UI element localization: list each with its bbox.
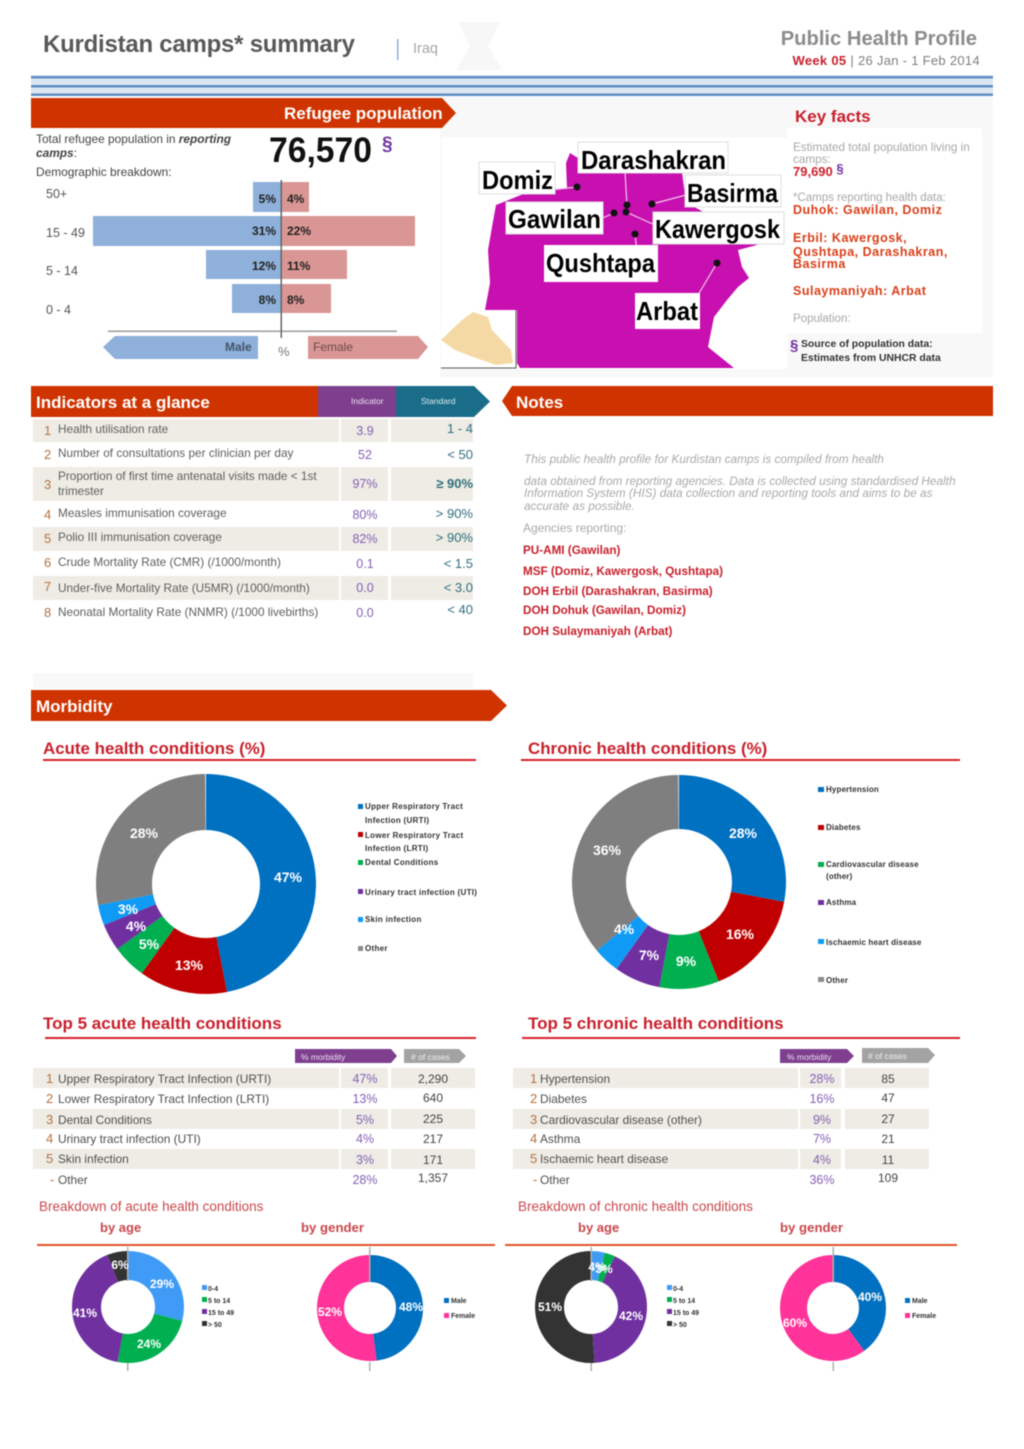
acute donut labels [118, 825, 303, 973]
top 5 chronic heading: Top 5 chronic health conditions [528, 1014, 784, 1033]
panel: indicators at a glance [31, 386, 490, 620]
acute table rows: Lower Respiratory Tract Infection (LRTI) [58, 1092, 269, 1106]
notes header [502, 386, 993, 416]
estimated population: Estimated total population living in [793, 141, 970, 154]
chronic table rows: 28% [809, 1072, 835, 1086]
camp label: Basirma: Basirma [687, 178, 778, 208]
chronic table rows: 9% [813, 1113, 831, 1127]
acute legend: Urinary tract infection (UTI) [365, 888, 477, 897]
panel: key facts: Erbil: Kawergosk, [793, 231, 907, 245]
row 1: Health utilisation rate [58, 422, 169, 436]
legend: acute by age [202, 1285, 234, 1329]
panel: refugee population: § [382, 134, 393, 155]
panel: chronic health conditions [521, 739, 960, 985]
chronic table rows: 85 [881, 1072, 895, 1086]
legend: acute by gender: Male [451, 1298, 467, 1305]
panel: refugee population [31, 98, 456, 359]
row 5: Polio III immunisation coverage [58, 530, 222, 544]
chronic table rows: Diabetes [540, 1092, 587, 1106]
population pyramid chart: 8% [287, 293, 305, 307]
panel: key facts: Sulaymaniyah: Arbat [793, 284, 927, 298]
panel: acute health conditions [43, 739, 477, 973]
panel: breakdown of acute conditions: by gender [301, 1220, 364, 1235]
chronic table rows: 4 [530, 1131, 537, 1146]
population source note: Source of population data: [801, 339, 933, 350]
inset: Iraq map [441, 310, 517, 368]
acute table rows: 3 [46, 1112, 53, 1127]
chronic table rows: 1 [530, 1071, 537, 1086]
donut: acute by age: 24% [137, 1337, 161, 1351]
refugee population banner [31, 98, 456, 128]
reporting agencies: DOH Dohuk (Gawilan, Domiz) [523, 604, 686, 617]
acute donut labels: 5% [139, 936, 160, 952]
reporting week: Week 05 | 26 Jan - 1 Feb 2014 [793, 53, 980, 68]
reporting agencies: DOH Erbil (Darashakran, Basirma) [523, 585, 713, 598]
acute donut labels: 3% [118, 901, 139, 917]
panel: notes: Agencies reporting: [523, 521, 626, 535]
row 4: > 90% [436, 506, 473, 521]
row 2: 2 [44, 447, 51, 462]
panel: top 5 chronic [513, 1014, 960, 1187]
legend: chronic by age [667, 1285, 699, 1329]
camp label: Qushtapa: Qushtapa [546, 248, 655, 278]
acute table rows: 3% [356, 1153, 374, 1167]
row 1: 3.9 [356, 424, 374, 438]
population pyramid chart: 22% [287, 224, 311, 238]
notes text: This public health profile for Kurdistan camps is compiled from health [524, 452, 884, 466]
row 8: < 40 [447, 602, 473, 617]
row 2: < 50 [447, 447, 473, 462]
reporting agencies: MSF (Domiz, Kawergosk, Qushtapa) [523, 565, 723, 578]
row 8: 8 [44, 605, 51, 620]
acute legend: Upper Respiratory Tract [365, 802, 463, 811]
notes text: accurate as possible. [524, 499, 635, 513]
camp label: Gawilan: Gawilan [508, 204, 601, 234]
camp label: Domiz: Domiz [482, 165, 553, 195]
notes header: Notes [516, 393, 563, 412]
population source note: Estimates from UNHCR data [801, 353, 941, 364]
chronic table rows: 4% [813, 1153, 831, 1167]
chronic table rows: 47 [881, 1091, 895, 1105]
chronic table rows [530, 1071, 898, 1187]
panel: key facts: Basirma [793, 257, 846, 271]
population pyramid chart: 5% [259, 192, 276, 206]
panel: breakdown of acute conditions: by age [100, 1220, 141, 1235]
donut: chronic by age [538, 1247, 643, 1371]
female arrow [308, 336, 428, 359]
column tag: morbidity: % morbidity [301, 1052, 346, 1062]
row 7: Under-five Mortality Rate (U5MR) (/1000/month) [58, 581, 310, 595]
acute table rows: 171 [423, 1153, 443, 1167]
donut: acute by gender: 48% [399, 1300, 423, 1314]
legend: acute by gender: Female [451, 1313, 475, 1320]
chronic donut labels: 16% [726, 926, 755, 942]
panel: top 5 acute [33, 1014, 476, 1187]
total refugee population text: camps [36, 146, 74, 160]
chronic donut labels: 36% [593, 842, 622, 858]
row 6: Crude Mortality Rate (CMR) (/1000/month) [58, 555, 281, 569]
panel: breakdown of acute conditions [37, 1199, 495, 1371]
indicators header: Standard [421, 396, 456, 406]
acute table rows: 2,290 [418, 1072, 448, 1086]
chronic donut labels: 7% [639, 947, 660, 963]
chronic table rows: 5 [530, 1151, 537, 1166]
chronic table rows: 16% [809, 1092, 835, 1106]
camp markers [574, 184, 720, 266]
population pyramid chart [46, 180, 415, 359]
row 6: 0.1 [356, 557, 374, 571]
page header [43, 28, 980, 68]
chronic table rows: Ischaemic heart disease [540, 1152, 669, 1166]
acute legend: Dental Conditions [365, 858, 439, 867]
chronic legend [818, 785, 922, 985]
row 3: Proportion of first time antenatal visits made < 1st [58, 469, 317, 483]
panel: key facts [787, 107, 982, 364]
reporting agencies: PU-AMI (Gawilan) [523, 544, 621, 557]
total population number: 76,570 [269, 131, 372, 170]
row 2: Number of consultations per clinician per day [58, 446, 294, 460]
column tag: cases [862, 1048, 935, 1063]
camp label: Darashakran: Darashakran [581, 145, 726, 175]
acute legend [358, 802, 477, 953]
population pyramid chart: 0 - 4 [46, 303, 71, 317]
title: Kurdistan camps* summary [43, 31, 356, 58]
legend: chronic by age: > 50 [673, 1322, 687, 1329]
profile title: Public Health Profile [781, 28, 977, 50]
donut: chronic by gender: 60% [783, 1316, 807, 1330]
chronic legend: Diabetes [826, 823, 861, 832]
chronic table rows: 3 [530, 1112, 537, 1127]
acute table rows: Other [58, 1173, 88, 1187]
legend: chronic by age: 0-4 [673, 1286, 683, 1293]
chronic legend: (other) [826, 872, 853, 881]
region shape [485, 153, 757, 368]
donut: acute by age: 41% [73, 1306, 97, 1320]
acute table rows: 4 [46, 1131, 53, 1146]
column tag: cases: # of cases [411, 1052, 450, 1062]
chronic table rows: 109 [878, 1171, 898, 1185]
panel: key facts: Duhok: Gawilan, Domiz [793, 203, 942, 217]
legend: acute by age: 0-4 [208, 1286, 218, 1293]
row 2: 52 [358, 448, 372, 462]
row 3: trimester [58, 484, 104, 498]
population pyramid chart: 50+ [46, 187, 67, 201]
column tag: morbidity: % morbidity [787, 1052, 832, 1062]
country label: Iraq [413, 41, 438, 57]
population pyramid chart: 5 - 14 [46, 264, 78, 278]
row 1: 1 [44, 423, 51, 438]
acute table rows: 13% [352, 1092, 378, 1106]
chronic table rows: 27 [881, 1112, 895, 1126]
chronic table rows: Hypertension [540, 1072, 610, 1086]
acute table rows: Urinary tract infection (UTI) [58, 1132, 201, 1146]
row 6 [44, 555, 473, 571]
legend: chronic by age: 5 to 14 [673, 1298, 695, 1305]
population pyramid chart: 11% [287, 259, 311, 273]
acute table rows: 5 [46, 1151, 53, 1166]
acute donut chart [124, 802, 288, 966]
legend: chronic by gender: Female [912, 1313, 936, 1320]
chronic donut labels: 4% [614, 921, 635, 937]
morbidity banner: Morbidity [36, 697, 113, 716]
row 8: Neonatal Mortality Rate (NNMR) (/1000 livebirths) [58, 605, 318, 619]
row 3 [44, 469, 473, 498]
chronic table rows: 11 [882, 1153, 895, 1167]
acute table rows: 640 [423, 1091, 443, 1105]
refugee population banner: Refugee population [284, 104, 443, 123]
row 1 [44, 421, 473, 438]
row 5 [44, 530, 473, 546]
donut: chronic by age: 3% [595, 1262, 613, 1276]
row 4 [44, 506, 473, 522]
panel: breakdown of chronic conditions [505, 1199, 957, 1371]
row 8: 0.0 [356, 606, 374, 620]
row 7: < 3.0 [444, 580, 473, 595]
population pyramid chart: 8% [259, 293, 276, 307]
acute table rows [46, 1071, 448, 1187]
notes text: data obtained from reporting agencies. Data is collected using standardised Health [524, 474, 956, 488]
acute breakdown heading: Breakdown of acute health conditions [39, 1199, 264, 1214]
column tag: morbidity [295, 1049, 397, 1063]
chronic legend: Ischaemic heart disease [826, 938, 922, 947]
chronic heading: Chronic health conditions (%) [528, 739, 767, 758]
legend: acute by gender [444, 1298, 475, 1320]
chronic donut labels: 28% [729, 825, 758, 841]
chronic table rows: Asthma [540, 1132, 581, 1146]
acute table rows: 1 [46, 1071, 53, 1086]
chronic donut labels: 9% [676, 953, 697, 969]
acute table rows: Skin infection [58, 1152, 129, 1166]
donut: chronic by gender: 40% [858, 1290, 882, 1304]
donut: acute by age: 29% [150, 1277, 174, 1291]
chronic legend: Cardiovascular disease [826, 860, 919, 869]
acute table rows: 5% [356, 1113, 374, 1127]
panel: key facts: § [836, 161, 844, 176]
panel: key facts: Qushtapa, Darashakran, [793, 245, 948, 259]
legend: chronic by gender: Male [912, 1298, 928, 1305]
row 5: 5 [44, 531, 51, 546]
chronic breakdown heading: Breakdown of chronic health conditions [518, 1199, 753, 1214]
male arrow [103, 336, 258, 359]
legend: chronic by age: 15 to 49 [673, 1310, 699, 1317]
panel: key facts: Population: [793, 313, 851, 325]
acute donut labels: 4% [126, 918, 147, 934]
legend: acute by age: 5 to 14 [208, 1298, 230, 1305]
column tag: cases: # of cases [868, 1051, 907, 1061]
column tag: morbidity [780, 1049, 854, 1063]
morbidity banner [31, 690, 507, 721]
row 5: 82% [352, 532, 378, 546]
donut: acute by age: 6% [111, 1258, 129, 1272]
population pyramid chart: 31% [252, 224, 276, 238]
population pyramid chart: 4% [287, 192, 305, 206]
chronic table rows: Cardiovascular disease (other) [540, 1113, 702, 1127]
column tag: cases [404, 1049, 466, 1063]
donut: acute by age [73, 1247, 174, 1371]
row 7 [44, 579, 473, 595]
total refugee population text: Total refugee population in reporting [36, 132, 231, 146]
chronic legend: Hypertension [826, 785, 879, 794]
acute donut labels: 47% [274, 869, 303, 885]
chronic legend: Other [826, 976, 848, 985]
row 4: 80% [352, 508, 378, 522]
acute table rows: 4% [356, 1132, 374, 1146]
donut: chronic by age: 51% [538, 1300, 562, 1314]
row 7: 0.0 [356, 581, 374, 595]
panel: key facts: § [790, 337, 798, 354]
chronic donut chart [599, 802, 759, 962]
key facts heading: Key facts [795, 107, 871, 126]
map [441, 138, 787, 369]
chronic table rows: Other [540, 1173, 570, 1187]
row 6: < 1.5 [444, 556, 473, 571]
acute donut labels: 13% [175, 957, 204, 973]
indicators header: Indicators at a glance [36, 393, 210, 412]
chronic legend: Asthma [826, 898, 857, 907]
row 4: 4 [44, 507, 51, 522]
row 6: 6 [44, 555, 51, 570]
row 8 [44, 602, 473, 620]
population pyramid chart: 15 - 49 [46, 226, 85, 240]
row 7: 7 [44, 579, 51, 594]
panel: key facts: 79,690 [793, 164, 833, 179]
acute legend: Lower Respiratory Tract [365, 831, 464, 840]
indicators header: Indicator [351, 396, 384, 406]
row 1: 1 - 4 [447, 421, 473, 436]
acute table rows: 1,357 [418, 1171, 448, 1185]
acute donut labels: 28% [130, 825, 159, 841]
chronic table rows: 36% [809, 1173, 835, 1187]
reporting agencies: DOH Sulaymaniyah (Arbat) [523, 625, 672, 638]
panel: notes [502, 386, 993, 638]
acute table rows: Upper Respiratory Tract Infection (URTI) [58, 1072, 271, 1086]
top 5 acute heading: Top 5 acute health conditions [43, 1014, 282, 1033]
acute legend: Other [365, 944, 388, 953]
acute heading: Acute health conditions (%) [43, 739, 265, 758]
camp label: Kawergosk: Kawergosk [655, 214, 780, 244]
acute table rows: 225 [423, 1112, 443, 1126]
donut: chronic by gender [783, 1247, 882, 1371]
female arrow: Female [313, 340, 353, 354]
acute legend: Infection (URTI) [365, 816, 429, 825]
row 3: 97% [352, 477, 378, 491]
donut: chronic by age: 4% [588, 1260, 606, 1274]
chronic table rows: 2 [530, 1091, 537, 1106]
chronic donut labels [593, 825, 758, 969]
row 3: 3 [44, 477, 51, 492]
total refugee population text: : [74, 146, 77, 160]
row 3: ≥ 90% [436, 476, 473, 491]
legend: acute by age: > 50 [208, 1322, 222, 1329]
acute table rows: - [50, 1172, 54, 1187]
acute legend: Infection (LRTI) [365, 844, 428, 853]
acute table rows: Dental Conditions [58, 1113, 152, 1127]
camp label: Arbat: Arbat [636, 296, 698, 326]
total refugee population text: Demographic breakdown: [36, 165, 172, 179]
chronic table rows: 7% [813, 1132, 831, 1146]
legend: acute by age: 15 to 49 [208, 1310, 234, 1317]
estimated population: camps: [793, 153, 831, 166]
acute table rows: 28% [352, 1173, 378, 1187]
donut: acute by gender [318, 1247, 423, 1371]
panel: breakdown of chronic conditions: by gender [780, 1220, 843, 1235]
chronic table rows: - [533, 1172, 537, 1187]
acute table rows: 47% [352, 1072, 378, 1086]
donut: chronic by age: 42% [619, 1309, 643, 1323]
row 4: Measles immunisation coverage [58, 506, 227, 520]
population pyramid chart: % [278, 344, 290, 359]
chronic table rows: 21 [881, 1132, 895, 1146]
acute legend: Skin infection [365, 915, 422, 924]
acute table rows: 2 [46, 1091, 53, 1106]
donut: acute by gender: 52% [318, 1305, 342, 1319]
notes text: Information System (HIS) data collection and reporting tools and aims to be as [524, 486, 933, 500]
acute table rows: 217 [423, 1132, 443, 1146]
camps reporting health data: *Camps reporting health data: [793, 192, 946, 204]
legend: chronic by gender [905, 1298, 936, 1320]
population pyramid chart: 12% [252, 259, 276, 273]
indicators header [31, 386, 490, 417]
row 2 [44, 446, 473, 462]
male arrow: Male [225, 340, 252, 354]
row 5: > 90% [436, 530, 473, 545]
panel: breakdown of chronic conditions: by age [578, 1220, 619, 1235]
